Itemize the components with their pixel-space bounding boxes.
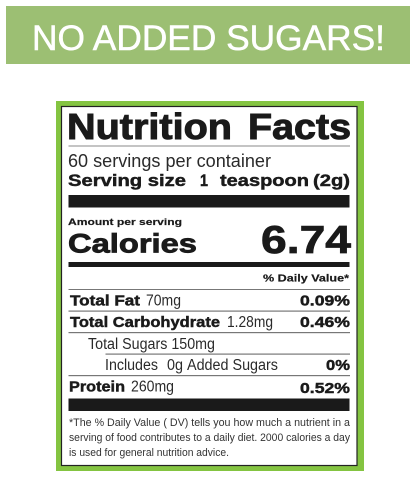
serving size: 1 <box>200 172 208 190</box>
row: added sugars: Includes <box>105 357 158 374</box>
serving size: (2g) <box>313 172 350 190</box>
amount per serving: Amount per serving <box>68 217 182 228</box>
row: protein <box>69 378 350 397</box>
title: Nutrition <box>67 106 232 147</box>
row: total fat: 70mg <box>146 292 181 310</box>
serving size: Serving size <box>68 172 186 190</box>
row: total carbohydrate: 1.28mg <box>227 314 273 331</box>
daily value header: % Daily Value* <box>263 274 349 284</box>
row: total carbohydrate <box>70 314 350 331</box>
row: total carbohydrate: Total Carbohydrate <box>70 315 220 331</box>
footnote <box>69 417 351 459</box>
servings per container: 60 servings per container <box>68 151 271 171</box>
row: total fat <box>70 292 350 310</box>
banner heading: NO ADDED SUGARS! <box>32 19 385 58</box>
footnote: is used for general nutrition advice. <box>69 447 229 459</box>
row: protein: 0.52% <box>300 381 350 397</box>
row: protein: Protein <box>69 380 125 396</box>
calories: 6.74 <box>261 219 351 262</box>
row: total fat: 0.09% <box>300 294 350 310</box>
row: total sugars: Total Sugars 150mg <box>88 336 215 353</box>
row: added sugars: 0% <box>326 358 350 374</box>
panel: nutrition facts label <box>56 101 364 471</box>
row: added sugars <box>105 357 350 374</box>
serving size <box>68 172 350 190</box>
footnote: serving of food contributes to a daily diet. 2000 calories a day <box>69 432 350 444</box>
row: added sugars: 0g <box>167 357 183 374</box>
row: total fat: Total Fat <box>70 294 140 310</box>
footnote: *The % Daily Value ( DV) tells you how much a nutrient in a <box>69 417 351 429</box>
row: added sugars: Added Sugars <box>187 357 278 374</box>
banner <box>6 6 410 64</box>
title <box>67 106 351 147</box>
serving size: teaspoon <box>220 172 309 190</box>
row: total carbohydrate: 0.46% <box>300 315 350 331</box>
calories: Calories <box>68 228 197 258</box>
row: protein: 260mg <box>131 378 174 396</box>
title: Facts <box>248 106 351 147</box>
calories <box>68 219 351 262</box>
